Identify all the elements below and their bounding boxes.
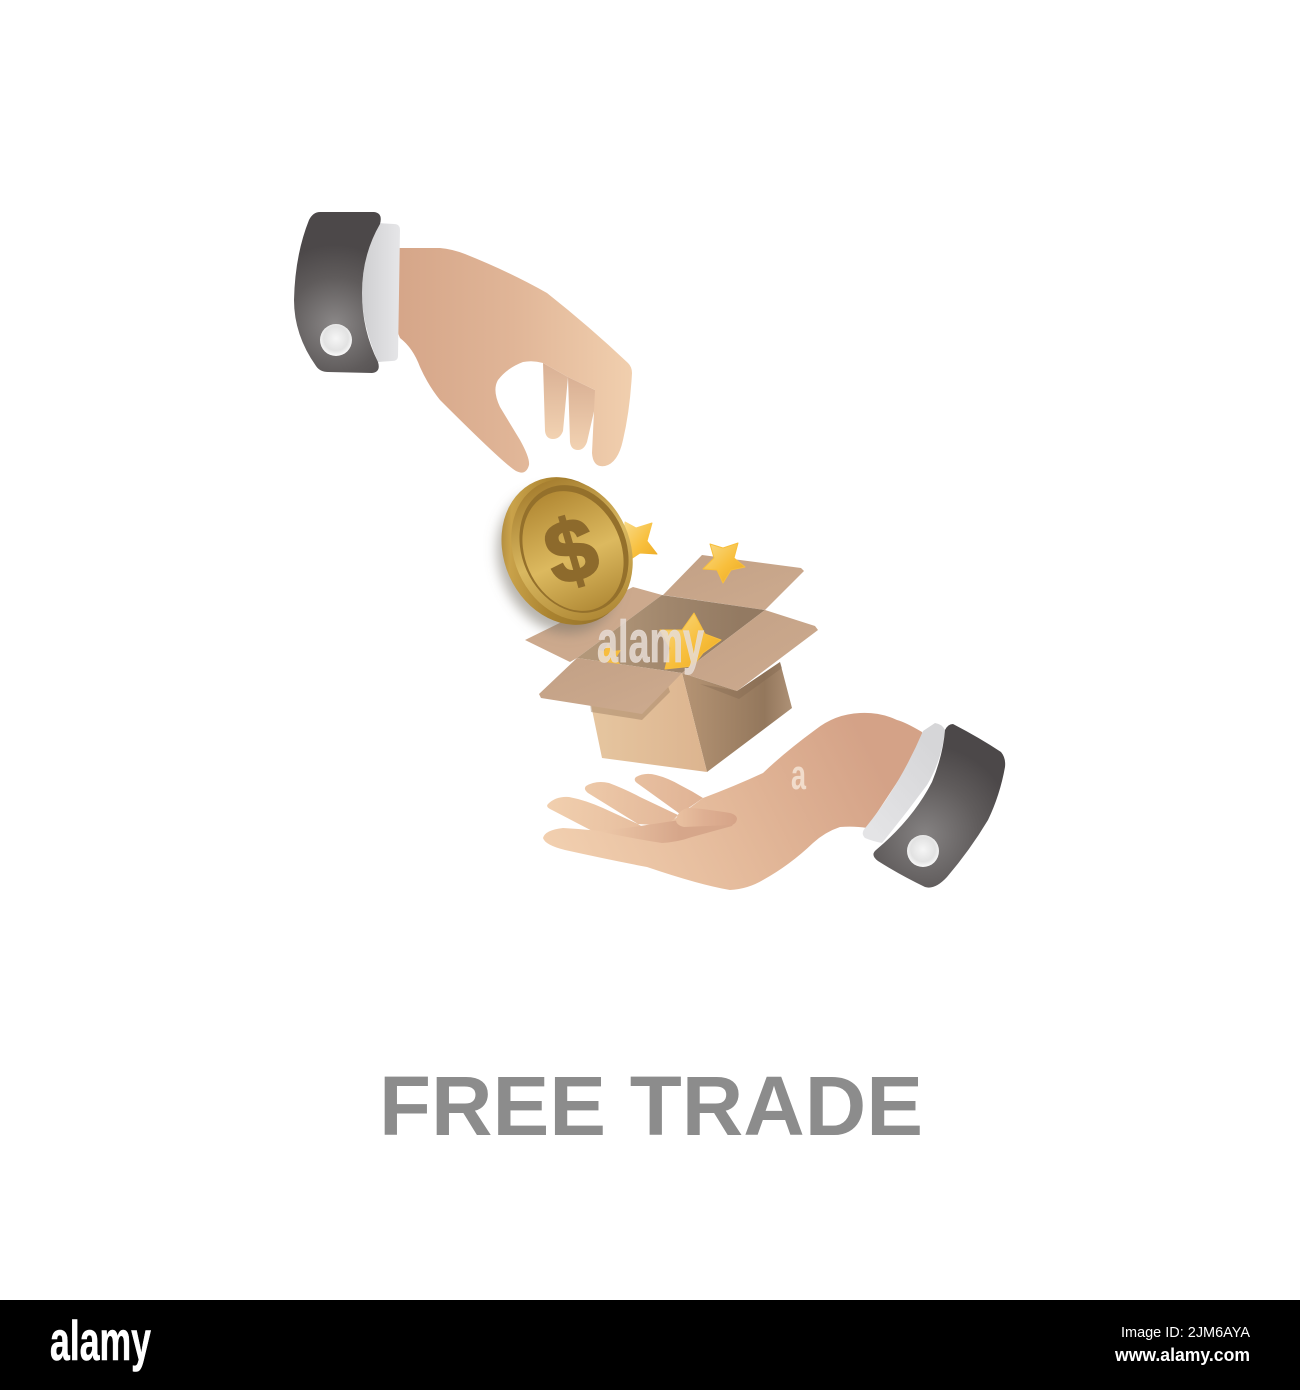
watermark: alamy [597, 609, 704, 675]
fingers [547, 774, 703, 838]
front face [590, 673, 707, 772]
right flap [682, 610, 818, 691]
right flap shadow [700, 662, 782, 699]
dollar sign: $ [534, 496, 608, 605]
sleeve button [907, 835, 939, 867]
hand back [393, 248, 632, 473]
palm crease [597, 818, 737, 843]
image id: Image ID: 2JM6AYA [1121, 1324, 1250, 1341]
front left flap [539, 658, 682, 714]
thumb [676, 808, 737, 827]
footer logo: alamy [50, 1309, 151, 1372]
front flap shadow [590, 686, 670, 720]
coin face [504, 475, 642, 627]
box interior [577, 595, 765, 673]
shirt cuff [362, 223, 400, 362]
star on back flap [703, 543, 745, 583]
back left flap [525, 587, 662, 662]
lower hand with cuff [543, 713, 1005, 890]
star behind coin [622, 522, 657, 565]
title: FREE TRADE [379, 1059, 923, 1153]
gold coin [475, 456, 655, 653]
open cardboard box [525, 555, 818, 772]
jacket sleeve [294, 212, 381, 373]
jacket sleeve [873, 724, 1005, 888]
website: www.alamy.com [1114, 1345, 1250, 1365]
watermark letter: a [791, 751, 806, 798]
coin groove [500, 468, 648, 630]
right face [682, 662, 792, 772]
small star in box [598, 643, 621, 664]
coin shadow [475, 471, 641, 653]
shirt cuff [863, 723, 945, 843]
palm and arm [543, 713, 925, 890]
coin rim [489, 460, 655, 640]
footer bar [0, 1300, 1300, 1390]
coin edge [478, 456, 654, 646]
back right flap [663, 555, 804, 610]
large star in box [660, 613, 721, 669]
sleeve button [320, 324, 352, 356]
upper hand with cuff [294, 212, 632, 473]
